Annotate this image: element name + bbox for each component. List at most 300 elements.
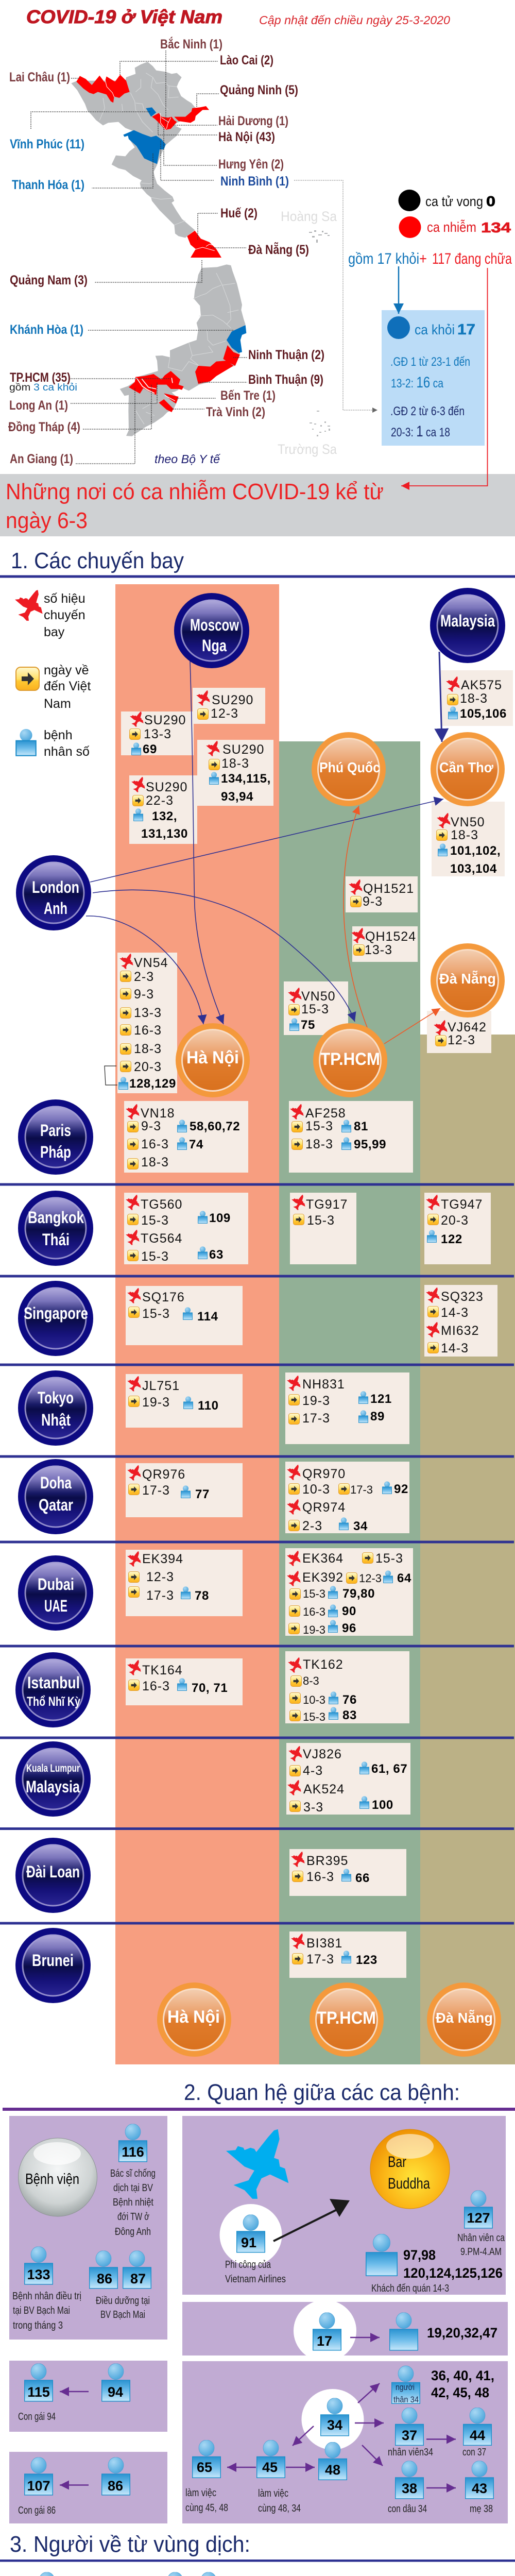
row: Istanbul xyxy=(15,1651,409,1727)
flight box: SQ323, MI632: SQ323 xyxy=(441,1290,484,1304)
flight box: VN18: 58,60,72 xyxy=(190,1120,240,1133)
province label: Ninh Bình: Ninh Bình (1) xyxy=(220,174,289,189)
badge: Đài Loan: Đài Loan xyxy=(26,1862,80,1881)
flight box: EK364, EK392: 96 xyxy=(342,1621,356,1635)
caption: 133: Bệnh nhân điều trị xyxy=(12,2291,81,2302)
flight box: SQ176 xyxy=(126,1286,243,1345)
panel: 107 daughter of 86 xyxy=(9,2452,167,2523)
icon: red plane xyxy=(15,590,43,621)
legend: flight key: Nam xyxy=(44,697,71,711)
caption: 133: tại BV Bạch Mai xyxy=(13,2305,70,2316)
hub: Đà Nẵng: Đà Nẵng xyxy=(439,970,496,987)
flight box: SQ176: 15-3 xyxy=(142,1307,170,1321)
patient 44: 44 xyxy=(470,2428,485,2443)
flight box: TK162: TK162 xyxy=(303,1657,344,1672)
islands: Hoàng Sa xyxy=(309,230,330,243)
legend: flight key: nhân số xyxy=(44,744,90,759)
flight box: JL751: 110 xyxy=(198,1399,219,1413)
flight box: VN18: 16-3 xyxy=(141,1137,169,1151)
flight box: TK162: 8-3 xyxy=(303,1674,319,1687)
badge: Moscow Nga: Nga xyxy=(202,636,227,655)
caption: 86, 87 xyxy=(96,2295,150,2320)
badge: London Anh: London xyxy=(32,878,79,896)
flight box: VN50 Cần Thơ: 101,102, xyxy=(450,844,501,858)
flight box: AF258 xyxy=(289,1101,413,1173)
badge: Bangkok: Bangkok xyxy=(28,1208,84,1227)
legend: flight key: bay xyxy=(44,625,65,639)
caption: 116: Bệnh nhiệt xyxy=(113,2197,153,2208)
islands: Trường Sa xyxy=(310,411,330,436)
flight box: TG917: TG917 xyxy=(306,1197,348,1212)
flight box: VN50 Cần Thơ: 18-3 xyxy=(451,828,478,842)
flight box: AK575 xyxy=(441,670,513,726)
legend: flight key: bệnh xyxy=(44,728,73,742)
flight box: JL751: JL751 xyxy=(142,1379,180,1393)
arrow: 94 to 115 xyxy=(60,2391,89,2392)
flight box: EK364, EK392: 19-3 xyxy=(303,1623,325,1636)
title: COVID-19 ở Việt Nam xyxy=(26,6,222,27)
captions in 34 cluster: con 37 xyxy=(462,2447,486,2458)
caption: 86, 87: BV Bạch Mai xyxy=(100,2309,145,2320)
legend: flight key xyxy=(15,590,91,759)
badge: Istanbul: Istanbul xyxy=(27,1673,80,1692)
flight box: QR976 xyxy=(126,1463,243,1517)
flight box: SU290 18-3: 93,94 xyxy=(221,790,253,804)
hub footer: Hà Nội: Hà Nội xyxy=(167,2007,220,2027)
badge: Bangkok: Thái xyxy=(42,1230,70,1249)
flight box: EK394: 78 xyxy=(195,1589,209,1603)
flight box: QH1524: 13-3 xyxy=(365,943,392,957)
flight box: VJ826, AK524: AK524 xyxy=(303,1782,345,1797)
badge: Tokyo: Nhật xyxy=(41,1411,71,1429)
flight box: VJ642: 12-3 xyxy=(448,1033,475,1047)
hub: Đà Nẵng xyxy=(431,943,505,1018)
badge: Doha xyxy=(18,1459,93,1534)
flight box: TG947: 20-3 xyxy=(441,1213,469,1228)
Bar Buddha sphere: Buddha xyxy=(388,2175,430,2192)
row: Bangkok Thái xyxy=(18,1191,491,1266)
icon: patient xyxy=(16,729,36,756)
row: Tokyo Nhật xyxy=(18,1370,409,1446)
flight box: SQ323, MI632 xyxy=(424,1285,497,1357)
badge: Brunei: Brunei xyxy=(32,1951,74,1970)
flight box: NH831: NH831 xyxy=(302,1377,345,1392)
recovered count: ca khỏi xyxy=(415,322,455,337)
flight box: VN18: 9-3 xyxy=(141,1119,161,1133)
flight box: VN50 Cần Thơ xyxy=(432,802,505,876)
phase 1 text: .GĐ 1 từ 23-1 đến xyxy=(390,355,470,369)
flight box: TG560, TG564: TG560 xyxy=(141,1197,182,1212)
legend: flight key: ngày về xyxy=(44,663,89,677)
patient 115: 115 xyxy=(27,2384,50,2400)
panel: pilot and Bar Buddha xyxy=(182,2116,506,2295)
legend: recovered circle xyxy=(387,316,410,339)
patient 127 xyxy=(465,2191,492,2228)
recovered count xyxy=(415,321,475,338)
province label: Bình Thuận: Bình Thuận (9) xyxy=(248,372,323,387)
phase 2 text: 20-3: 1 ca 18 xyxy=(391,423,450,440)
flight box: VN54: VN54 xyxy=(134,956,168,970)
badge: Tokyo xyxy=(18,1370,93,1446)
caption: 127: 9.PM-4.AM xyxy=(460,2246,502,2258)
captions in 34 cluster: làm việc xyxy=(185,2487,216,2499)
province label: Quảng Ninh: Quảng Ninh (5) xyxy=(220,83,298,97)
flight box: QR970, QR974: 92 xyxy=(394,1482,408,1496)
province label: Vĩnh Phúc: Vĩnh Phúc (11) xyxy=(10,137,84,151)
patient 38: 38 xyxy=(402,2481,417,2496)
hub: Cần Thơ: Cần Thơ xyxy=(439,759,493,775)
flight box: SU290 13-3 xyxy=(121,711,194,756)
badge: Paris: Paris xyxy=(40,1121,71,1140)
flight box: VN18: 18-3 xyxy=(141,1155,169,1170)
flight box: SU290 13-3: SU290 xyxy=(144,713,186,727)
patient 107: 107 xyxy=(27,2478,50,2494)
flight box: VN54: 16-3 xyxy=(134,1023,162,1038)
flight box: TK162 xyxy=(285,1651,409,1723)
flight box: QH1521 xyxy=(346,876,418,912)
flight box: SQ176: SQ176 xyxy=(142,1290,185,1304)
badge: Istanbul xyxy=(15,1652,91,1727)
caption: Con gái 86 xyxy=(18,2505,56,2516)
province label: Quảng Nam: Quảng Nam (3) xyxy=(10,273,88,287)
caption: 116 xyxy=(110,2168,156,2238)
flight box: AK575: 18-3 xyxy=(460,691,488,706)
arrow: TP.HCM to Phú Quốc xyxy=(344,806,368,1029)
flight box: QH1521: QH1521 xyxy=(363,882,414,896)
column: TP.HCM xyxy=(279,741,420,2064)
flight box: VJ826, AK524: VJ826 xyxy=(303,1747,342,1761)
caption: 133: trong tháng 3 xyxy=(13,2320,63,2331)
flight box: EK394: 12-3 xyxy=(146,1570,174,1584)
flight box: SU290 22-3 xyxy=(129,775,197,844)
flight box: TK162: 10-3 xyxy=(303,1693,325,1706)
flight box: QR970, QR974: 34 xyxy=(353,1519,368,1533)
arrow: recovered xyxy=(398,266,399,314)
patient 37 xyxy=(396,2408,423,2445)
patients: bar guests xyxy=(366,2234,503,2281)
flight box: QR970, QR974: QR974 xyxy=(302,1500,346,1515)
flight box: VN54: 18-3 xyxy=(134,1042,162,1056)
flight box: SU290 18-3 xyxy=(197,740,273,806)
Bar Buddha sphere: Bar xyxy=(388,2154,406,2171)
flight box: NH831 xyxy=(285,1372,409,1444)
flight box: TK164: 70, 71 xyxy=(192,1681,228,1695)
icon: blue plane xyxy=(226,2129,288,2199)
hub footer: Hà Nội xyxy=(157,1982,231,2057)
caption: 133 xyxy=(12,2291,81,2331)
hub footer: Đà Nẵng xyxy=(427,1982,501,2057)
flight box: VJ826, AK524: 4-3 xyxy=(303,1764,323,1778)
flight box: VJ826, AK524 xyxy=(286,1743,410,1815)
section 3 heading: 3. Người về từ vùng dịch: xyxy=(10,2532,250,2557)
relative case numbers: 36, 40, 41, xyxy=(431,2368,494,2383)
flight box: SQ323, MI632: MI632 xyxy=(441,1324,479,1338)
row: Dubai UAE xyxy=(18,1548,413,1636)
arrow: 17 to contacts xyxy=(350,2337,380,2338)
captions in 34 cluster: nhân viên34 xyxy=(388,2447,433,2458)
highlight circle xyxy=(219,2204,282,2266)
patient 94: 94 xyxy=(108,2384,123,2400)
flight box: SU290 22-3: SU290 xyxy=(146,780,187,794)
badge: Singapore: Singapore xyxy=(24,1304,88,1323)
patient 86 xyxy=(102,2458,130,2495)
flight box: QH1524 xyxy=(351,926,418,962)
flight box: TG560, TG564: 63 xyxy=(209,1248,224,1262)
row: Paris Pháp xyxy=(18,1099,413,1175)
patient 115 xyxy=(25,2364,53,2401)
heading band xyxy=(0,474,515,536)
flight box: EK394 xyxy=(126,1550,243,1616)
flight box: AF258: 95,99 xyxy=(354,1138,386,1151)
flight box: SU290 12-3 xyxy=(193,688,265,724)
badge: Bangkok xyxy=(18,1191,93,1266)
phase 1 text xyxy=(390,355,470,391)
phase 1 text: 13-2: 16 ca xyxy=(391,374,444,391)
patient 118 xyxy=(195,2572,222,2576)
badge: Kuala Lumpur: Kuala Lumpur xyxy=(26,1762,80,1774)
captions in 34 cluster: cùng 48, 34 xyxy=(258,2503,301,2514)
caption: bar guests: Khách đến quán 14-3 xyxy=(371,2283,449,2294)
flight box: EK394: EK394 xyxy=(142,1552,183,1566)
gray dotted connector from Ninh Bình to recovered box xyxy=(294,180,377,410)
hospital sphere: Bệnh viện xyxy=(25,2171,79,2188)
patient 133: 133 xyxy=(27,2267,50,2282)
flight box: VN50 TP.HCM xyxy=(284,981,348,1035)
flight box: VN18 xyxy=(124,1101,248,1173)
breakdown text: recovered + treating xyxy=(348,250,512,267)
hub: Hà Nội xyxy=(176,1023,250,1097)
arrow: 91 to Bar Buddha xyxy=(273,2199,350,2241)
flight box: NH831: 121 xyxy=(370,1392,392,1406)
province label: Hải Dương: Hải Dương (1) xyxy=(218,114,288,128)
patient 86 xyxy=(90,2250,117,2289)
patient 65 xyxy=(193,2440,220,2478)
flight box: QR976: 77 xyxy=(195,1487,210,1501)
flight box: SU290 13-3: 13-3 xyxy=(144,727,171,741)
flight box: SU290 22-3: 132, xyxy=(152,809,177,823)
flight box: EK364, EK392 xyxy=(285,1548,413,1636)
hub: Phú Quốc: Phú Quốc xyxy=(319,759,380,775)
patient 34 xyxy=(321,2398,349,2436)
flight box: VJ642: VJ642 xyxy=(448,1020,487,1035)
hub footer: TP.HCM: TP.HCM xyxy=(317,2008,376,2028)
flight box: VJ642 xyxy=(427,1011,491,1053)
arrow: 86 to 107 xyxy=(60,2484,89,2486)
flight box: BR395 xyxy=(289,1849,406,1896)
caption: pilot xyxy=(225,2259,286,2285)
panel: patient 17 cluster xyxy=(182,2300,508,2362)
flight box: SU290 12-3: SU290 xyxy=(212,693,253,707)
arrow: London to Hà Nội xyxy=(86,916,203,1024)
flight box: VN50 TP.HCM: VN50 xyxy=(301,989,336,1004)
badge: Tokyo: Tokyo xyxy=(38,1388,74,1407)
patient 65: 65 xyxy=(197,2460,212,2475)
flight box: AK575: 105,106 xyxy=(460,707,507,721)
heading band: ngày 6-3 xyxy=(6,508,88,533)
note: gồm 3 ca khỏi: gồm 3 ca khỏi xyxy=(9,382,77,393)
arrow: London to TP.HCM xyxy=(93,890,355,1022)
patient 37: 37 xyxy=(402,2428,417,2443)
captions in 34 cluster: cùng 45, 48 xyxy=(185,2502,228,2514)
captions in 34 cluster xyxy=(185,2447,493,2515)
flight box: TG560, TG564: TG564 xyxy=(141,1231,182,1246)
column: Hà Nội xyxy=(115,584,279,2064)
flight box: VN18: 74 xyxy=(189,1138,203,1151)
flight box: SQ176: 114 xyxy=(197,1310,218,1324)
patients: 19,20,32,47 xyxy=(390,2312,497,2350)
province label: Đà Nẵng: Đà Nẵng (5) xyxy=(248,242,309,257)
badge: Istanbul: Thổ Nhĩ Kỳ xyxy=(27,1694,80,1709)
patient 116 xyxy=(119,2124,147,2162)
flight box: VN54 xyxy=(117,953,177,1093)
captions in 34 cluster: làm việc xyxy=(258,2488,288,2499)
province label: Lai Châu: Lai Châu (1) xyxy=(9,70,70,84)
badge: Singapore xyxy=(18,1281,93,1356)
patient 117 xyxy=(161,2572,189,2576)
row: Đài Loan xyxy=(15,1838,406,1913)
badge: Dubai: Dubai xyxy=(38,1575,74,1594)
flight box: EK364, EK392: 64 xyxy=(397,1571,411,1585)
arrow: TP.HCM to Đà Nẵng xyxy=(384,1008,440,1044)
flight box: QR970, QR974 xyxy=(285,1462,409,1533)
patient 91: 91 xyxy=(241,2235,256,2250)
badge: Đài Loan xyxy=(15,1838,91,1913)
flight box: SU290 12-3: 12-3 xyxy=(211,706,238,721)
row: Kuala Lumpur Malaysia xyxy=(15,1741,410,1817)
badge: Paris xyxy=(18,1099,93,1175)
flight box: VN54: 13-3 xyxy=(134,1006,162,1020)
flight box: TK162: 83 xyxy=(342,1708,357,1722)
flight box: QR970, QR974: 17-3 xyxy=(350,1483,373,1496)
flight box: EK364, EK392: 79,80 xyxy=(342,1587,375,1601)
phase 2 text: .GĐ 2 từ 6-3 đến xyxy=(390,404,465,418)
flight box: NH831: 17-3 xyxy=(302,1411,330,1426)
phase 2 text xyxy=(390,404,465,440)
flight box: SU290 13-3: 69 xyxy=(143,742,157,756)
flight box: SU290 22-3: 131,130 xyxy=(141,827,188,841)
flight box: AF258: 81 xyxy=(354,1120,368,1133)
flight box: VN50 TP.HCM: 75 xyxy=(301,1018,315,1032)
province label: Lào Cai: Lào Cai (2) xyxy=(220,53,273,67)
flight box: VN18: VN18 xyxy=(141,1106,175,1121)
flight box: EK364, EK392: EK392 xyxy=(302,1570,344,1585)
caption: 86, 87: Điều dưỡng tại xyxy=(96,2295,150,2307)
badge: Moscow Nga xyxy=(174,593,249,668)
patient 119 xyxy=(33,2572,61,2576)
province label: Khánh Hòa: Khánh Hòa (1) xyxy=(10,323,83,337)
row: Doha Qatar xyxy=(18,1459,409,1534)
patients: bar guests: 120,124,125,126 xyxy=(403,2265,503,2281)
flight box: SU290 18-3: SU290 xyxy=(222,742,264,757)
flight box: AF258: 18-3 xyxy=(305,1137,333,1151)
relative case numbers: 42, 45, 48 xyxy=(431,2385,489,2400)
highlight circle xyxy=(302,2389,364,2450)
hospital sphere xyxy=(19,2138,97,2216)
flight box: VN50 Cần Thơ: VN50 xyxy=(451,815,485,829)
patient 44 xyxy=(464,2408,491,2445)
heading band: Những nơi có ca nhiễm COVID-19 kể từ xyxy=(6,479,384,504)
flight box: TG917: 15-3 xyxy=(307,1213,335,1228)
legend: deaths: ca tử vong xyxy=(425,194,483,209)
flight box: AK575: AK575 xyxy=(461,678,502,692)
flight box: BI381 xyxy=(289,1931,406,1978)
flight box: NH831: 19-3 xyxy=(302,1394,330,1408)
province label: Ninh Thuận: Ninh Thuận (2) xyxy=(248,348,324,362)
patient 38 xyxy=(396,2461,423,2499)
flight box: SQ323, MI632: 14-3 xyxy=(441,1306,469,1320)
legend: deaths: 0 xyxy=(486,193,495,209)
caption: 116: Bác sĩ chống xyxy=(110,2168,156,2179)
flight box: BR395: 66 xyxy=(355,1871,370,1885)
flight box: TG560, TG564: 15-3 xyxy=(141,1249,169,1264)
flight box: EK364, EK392: EK364 xyxy=(302,1551,344,1566)
highlight circle xyxy=(294,2300,356,2362)
flight box: VN54: 9-3 xyxy=(134,987,154,1002)
flight box: AF258: 15-3 xyxy=(305,1119,333,1133)
badge: London Anh: Anh xyxy=(44,899,67,918)
flight box: TG560, TG564: 15-3 xyxy=(141,1213,169,1228)
flight box: TK164: 16-3 xyxy=(142,1679,170,1693)
flight box: EK364, EK392: 16-3 xyxy=(303,1605,325,1618)
hub footer: TP.HCM xyxy=(310,1982,384,2057)
hub: Hà Nội: Hà Nội xyxy=(186,1048,239,1067)
flight box: TK164 xyxy=(126,1658,243,1705)
patient 34: 34 xyxy=(327,2417,342,2433)
caption: 116: đới TW ở xyxy=(117,2211,149,2223)
badge: Paris: Pháp xyxy=(40,1143,71,1161)
caption: 116: Đông Anh xyxy=(115,2226,151,2238)
flight box: EK394: 17-3 xyxy=(146,1588,174,1603)
flight box: QR970, QR974: QR970 xyxy=(302,1467,346,1481)
legend: flight key: đến Việt xyxy=(44,679,91,693)
caption: pilot: Vietnam Airlines xyxy=(225,2274,286,2285)
map leader lines xyxy=(31,50,247,464)
flight box: BI381: BI381 xyxy=(306,1936,342,1951)
flight box: VJ826, AK524: 3-3 xyxy=(303,1800,323,1815)
flight box: VN54: 128,129 xyxy=(129,1077,176,1091)
flight box: TG560, TG564: 109 xyxy=(209,1211,231,1225)
legend: flight key: số hiệu xyxy=(44,591,85,606)
patient 87 xyxy=(123,2250,151,2289)
flight box: QR970, QR974: 2-3 xyxy=(302,1519,322,1533)
province label: Hưng Yên: Hưng Yên (2) xyxy=(218,157,284,172)
flight box: EK364, EK392: 15-3 xyxy=(303,1587,325,1600)
panel: patient 34 cluster xyxy=(182,2361,508,2523)
flight box: QH1524: QH1524 xyxy=(365,929,416,944)
flight box: VN50 Cần Thơ: 103,104 xyxy=(450,862,497,876)
row: Brunei xyxy=(15,1928,406,2003)
patient 91 xyxy=(237,2214,265,2252)
flight box: TK164: TK164 xyxy=(142,1663,183,1677)
patient group: người thân 34: thân 34 xyxy=(393,2395,419,2404)
flight box: VN54: 20-3 xyxy=(134,1060,162,1074)
flight box: TG947 xyxy=(424,1193,491,1264)
patient group: người thân 34: người xyxy=(396,2382,415,2392)
row: Singapore xyxy=(18,1281,497,1357)
flight box: TG560, TG564 xyxy=(124,1193,248,1264)
province label: Bến Tre: Bến Tre (1) xyxy=(220,388,276,403)
province label: Bắc Ninh: Bắc Ninh (1) xyxy=(160,36,222,52)
flight box: BR395: 16-3 xyxy=(306,1870,334,1884)
flight box: VN50 TP.HCM: 15-3 xyxy=(301,1002,329,1016)
bracket arrow VN54 20-3 to patients xyxy=(105,1066,117,1085)
label: Trường Sa: Trường Sa xyxy=(278,442,337,457)
section 2 heading: 2. Quan hệ giữa các ca bệnh: xyxy=(184,2080,460,2105)
arrows in 34 cluster xyxy=(227,2383,456,2488)
map of Vietnam xyxy=(71,62,330,436)
flight box: QR976: 17-3 xyxy=(142,1483,170,1498)
flight box: AF258: AF258 xyxy=(305,1106,346,1121)
